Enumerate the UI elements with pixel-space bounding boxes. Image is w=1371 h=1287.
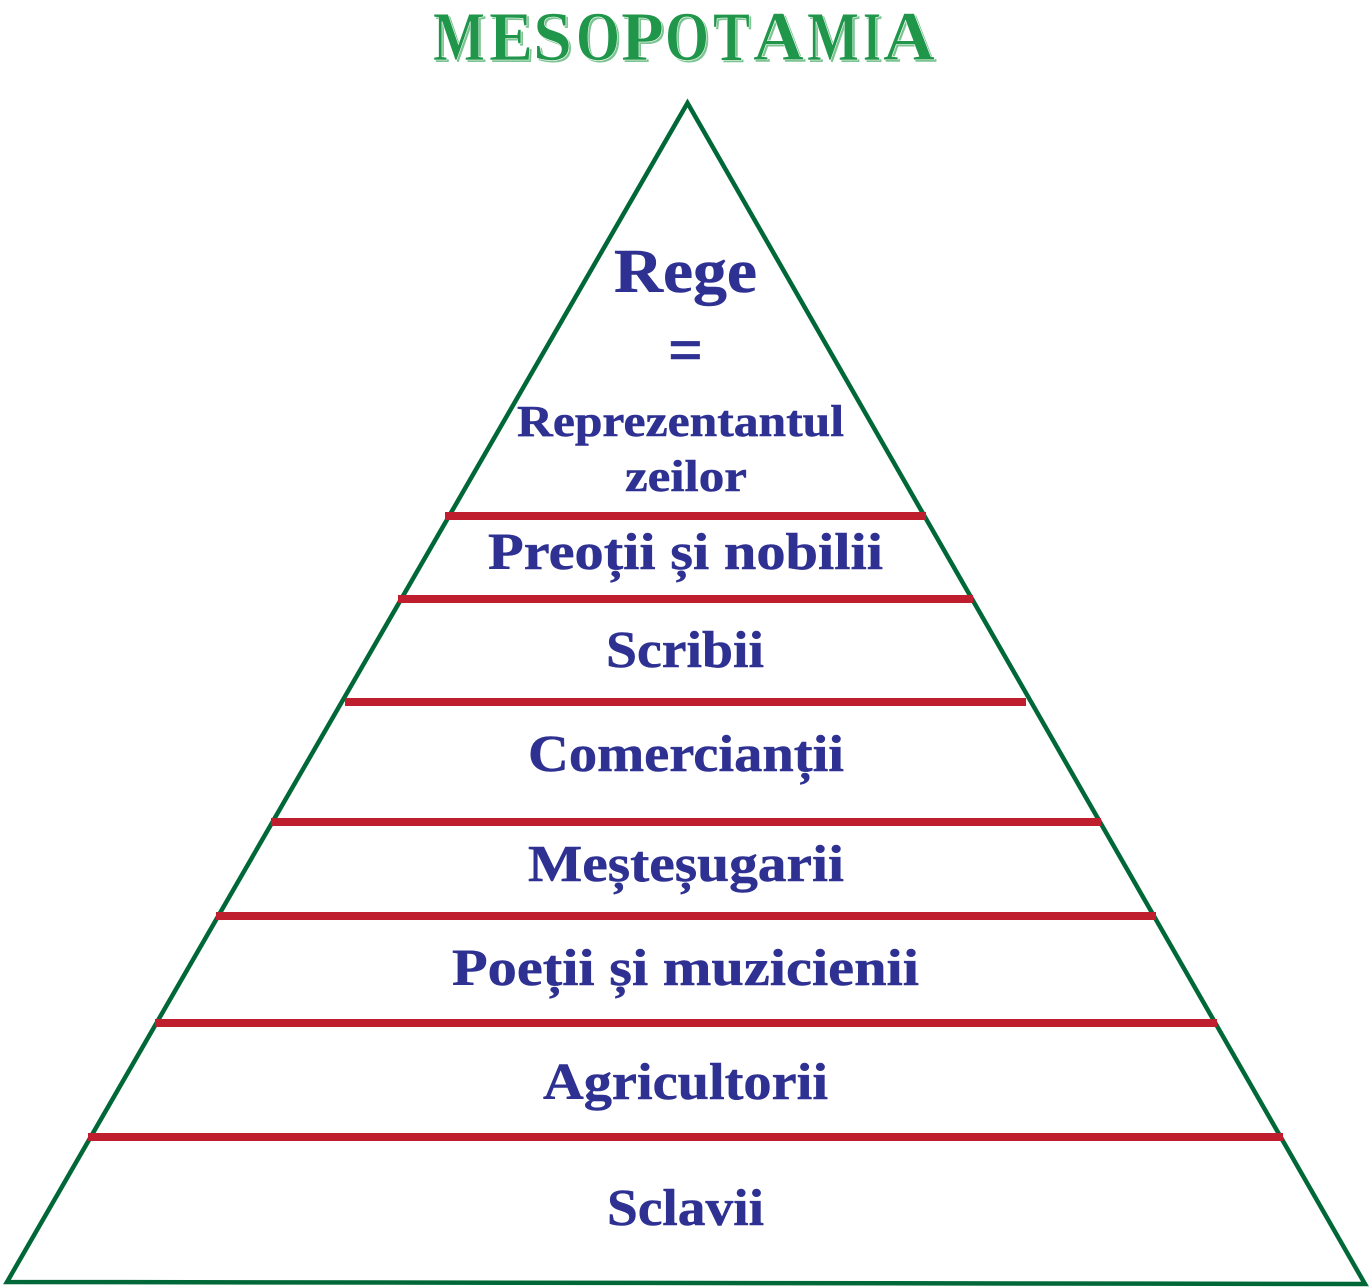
title: O — [665, 0, 709, 76]
title: I — [863, 0, 881, 76]
tier: farmers: Agricultorii — [543, 1054, 828, 1111]
title: O — [576, 0, 620, 76]
tier: priests and nobles: Preoții și nobilii — [488, 524, 883, 583]
title: E — [489, 0, 533, 76]
title: T — [715, 1, 752, 78]
title: S — [533, 0, 572, 76]
title: M — [435, 1, 487, 78]
title: M — [809, 1, 861, 78]
tier: poets and musicians: Poeții și muzicienii — [452, 940, 919, 999]
tier: king: zeilor — [625, 452, 747, 501]
tier dividers — [88, 512, 1283, 1141]
title: P — [623, 1, 666, 78]
tier: king: = — [668, 314, 703, 387]
tier: craftsmen: Meșteșugarii — [528, 836, 844, 895]
tier: king: Rege — [614, 238, 757, 306]
title: I — [865, 1, 883, 78]
title: P — [621, 0, 664, 76]
title — [433, 0, 937, 78]
title: A — [755, 1, 806, 78]
title: A — [883, 0, 935, 76]
tier: slaves: Sclavii — [607, 1180, 764, 1237]
title: O — [578, 1, 622, 78]
title: O — [667, 1, 711, 78]
tier: king: Reprezentantul — [517, 397, 844, 446]
title: T — [713, 0, 750, 76]
title: S — [535, 1, 574, 78]
title: A — [753, 0, 804, 76]
title: A — [885, 1, 937, 78]
title: E — [491, 1, 535, 78]
tier: scribes: Scribii — [606, 622, 764, 679]
tier: king — [517, 238, 844, 501]
title: M — [807, 0, 859, 76]
title: M — [433, 0, 485, 76]
tier: merchants: Comercianții — [528, 726, 844, 785]
